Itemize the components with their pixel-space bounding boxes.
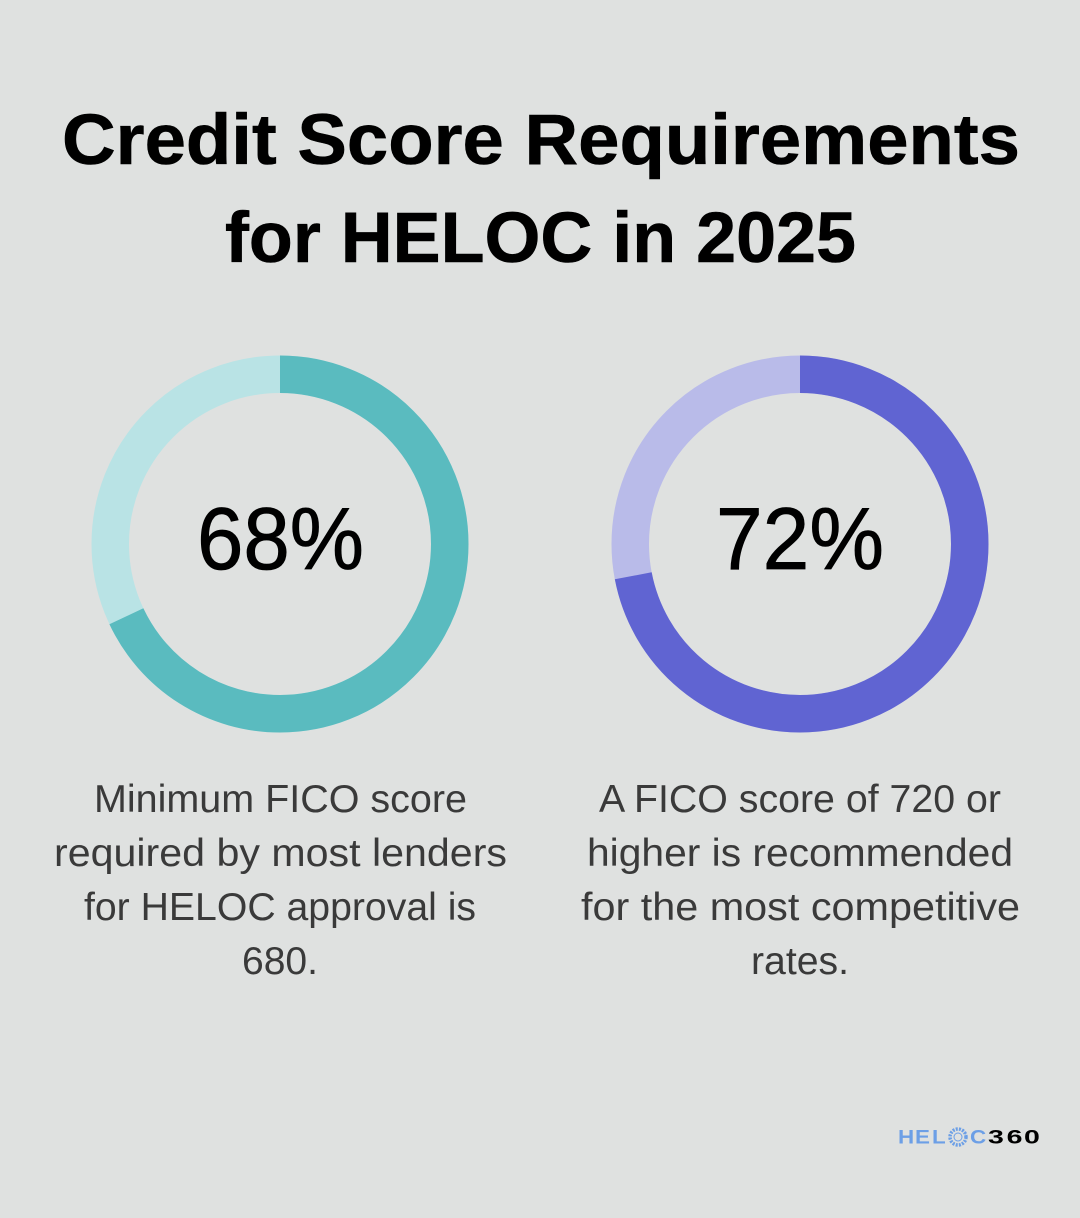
title: Credit Score Requirements (62, 101, 1020, 180)
value: 68%: 68% (197, 489, 364, 588)
description: minimum FICO score: Minimum FICO score (94, 778, 467, 821)
logo: HELOC360: HELOC (898, 1127, 986, 1148)
donut chart: 72% (630, 374, 970, 714)
title (62, 101, 1020, 278)
logo: HELOC360: 360 (988, 1127, 1040, 1148)
donut chart: 68% (110, 374, 450, 714)
description: recommended FICO score: for the most competitive (581, 886, 1020, 929)
title: for HELOC in 2025 (225, 199, 856, 278)
panel: 68% minimum FICO statistic (54, 374, 507, 983)
description: recommended FICO score: A FICO score of 720 or (599, 778, 1001, 821)
logo: HELOC360 (898, 1127, 1040, 1148)
description: recommended FICO score: higher is recommended (587, 832, 1013, 875)
value: 72%: 72% (716, 489, 884, 588)
description: recommended FICO score: rates. (751, 940, 849, 983)
description: recommended FICO score (581, 778, 1020, 983)
panel: 72% recommended FICO statistic (581, 374, 1020, 983)
description: minimum FICO score (54, 778, 507, 983)
description: minimum FICO score: 680. (242, 940, 318, 983)
description: minimum FICO score: for HELOC approval is (84, 886, 476, 929)
description: minimum FICO score: required by most lenders (54, 832, 507, 875)
